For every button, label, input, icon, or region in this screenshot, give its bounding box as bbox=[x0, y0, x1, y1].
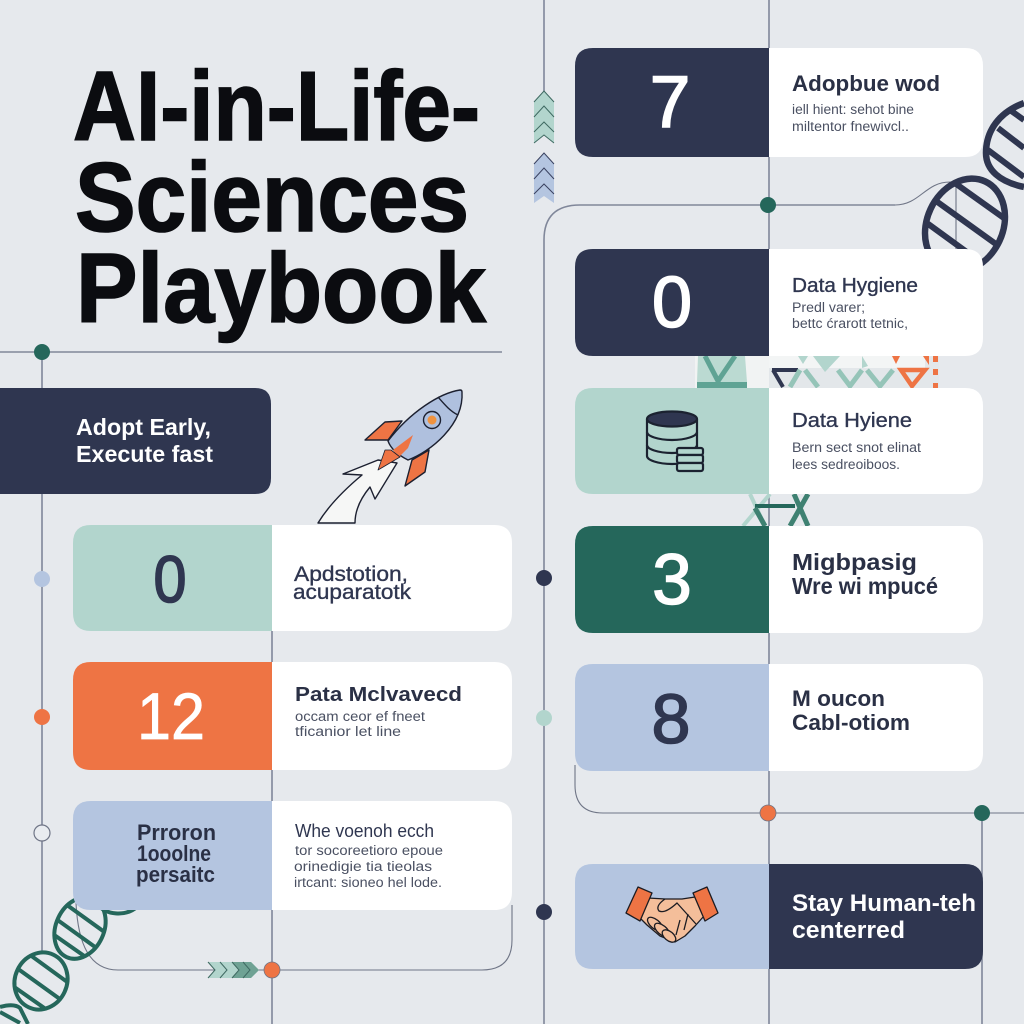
card: 7 bbox=[575, 48, 983, 157]
icon: database bbox=[647, 412, 703, 471]
card: persona: irtcant: sioneo hel lode. bbox=[294, 875, 442, 890]
card: 12 data: Pata Mclvavecd bbox=[295, 684, 462, 706]
card: persona: tor socoreetioro epoue bbox=[295, 843, 443, 858]
card: adoption 0 bbox=[73, 525, 512, 631]
panel: adopt early banner: Adopt Early, bbox=[76, 414, 211, 440]
card: 12 data: tficanior let line bbox=[295, 724, 401, 739]
card: adoption 0: Apdstotion, bbox=[294, 563, 408, 586]
icon: handshake bbox=[626, 887, 718, 945]
title bbox=[73, 51, 486, 343]
triangle pattern strip bbox=[695, 356, 939, 388]
panel: adopt early banner bbox=[0, 388, 271, 494]
card: persona: 1ooolne bbox=[137, 841, 211, 866]
triangle pattern lower bbox=[743, 494, 808, 526]
card: 12 data: occam ceor ef fneet bbox=[295, 709, 425, 724]
card: 12 data bbox=[73, 662, 512, 770]
title: AI-in-Life- bbox=[73, 51, 480, 161]
card: persona: Prroron bbox=[137, 820, 216, 845]
card: 3 bbox=[575, 526, 983, 633]
card: persona bbox=[73, 801, 512, 910]
chevrons: blue stack bbox=[534, 153, 554, 203]
card: 7: iell hient: sehot bine bbox=[792, 102, 914, 117]
chevrons: horizontal arrow bbox=[208, 962, 259, 978]
card: stay human centered: Stay Human-teh bbox=[792, 890, 976, 917]
card: 7: Adopbue wod bbox=[792, 71, 940, 96]
card: 0 data hygiene: Data Hygiene bbox=[792, 275, 918, 297]
card: database data hygiene: Bern sect snot elinat bbox=[792, 440, 921, 455]
chevrons: mint stack bbox=[534, 91, 554, 143]
card: 7: miltentor fnewivcl.. bbox=[792, 119, 909, 134]
card: 7: 7 bbox=[650, 62, 690, 143]
panel: adopt early banner: Execute fast bbox=[76, 441, 213, 467]
card: adoption 0: 0 bbox=[154, 542, 186, 616]
card: database data hygiene: Data Hyiene bbox=[792, 410, 912, 432]
card: 3: Wre wi mpucé bbox=[792, 573, 938, 599]
card: stay human centered: centerred bbox=[792, 917, 905, 944]
card: 8: Cabl-otiom bbox=[792, 710, 910, 735]
card: 0 data hygiene: bettc ćrarott tetnic, bbox=[792, 316, 908, 331]
card: 12 data: 12 bbox=[137, 679, 205, 753]
card: 0 data hygiene: Predl varer; bbox=[792, 300, 865, 315]
card: 3: Migbpasig bbox=[792, 549, 917, 575]
title: Sciences bbox=[75, 142, 469, 252]
card: 3: 3 bbox=[652, 541, 692, 620]
card: 8: 8 bbox=[652, 680, 690, 758]
DNA helix: green, bottom left bbox=[0, 889, 138, 1024]
card: database data hygiene bbox=[575, 388, 983, 494]
card: adoption 0: acuparatotk bbox=[293, 581, 412, 604]
card: 0 data hygiene bbox=[575, 249, 983, 356]
card: 0 data hygiene: 0 bbox=[652, 263, 692, 343]
card: 8 bbox=[575, 664, 983, 771]
card: 8: M oucon bbox=[792, 686, 885, 711]
card: persona: Whe voenoh ecch bbox=[295, 821, 434, 841]
card: persona: orinedigie tia tieolas bbox=[294, 859, 432, 874]
card: persona: persaitc bbox=[136, 862, 215, 887]
title: Playbook bbox=[76, 233, 486, 343]
card: stay human centered bbox=[575, 864, 983, 969]
card: database data hygiene: lees sedreoiboos. bbox=[792, 457, 900, 472]
node dots bbox=[34, 197, 990, 978]
icon: rocket bbox=[318, 390, 462, 523]
DNA helix: navy, top right bbox=[922, 100, 1024, 266]
